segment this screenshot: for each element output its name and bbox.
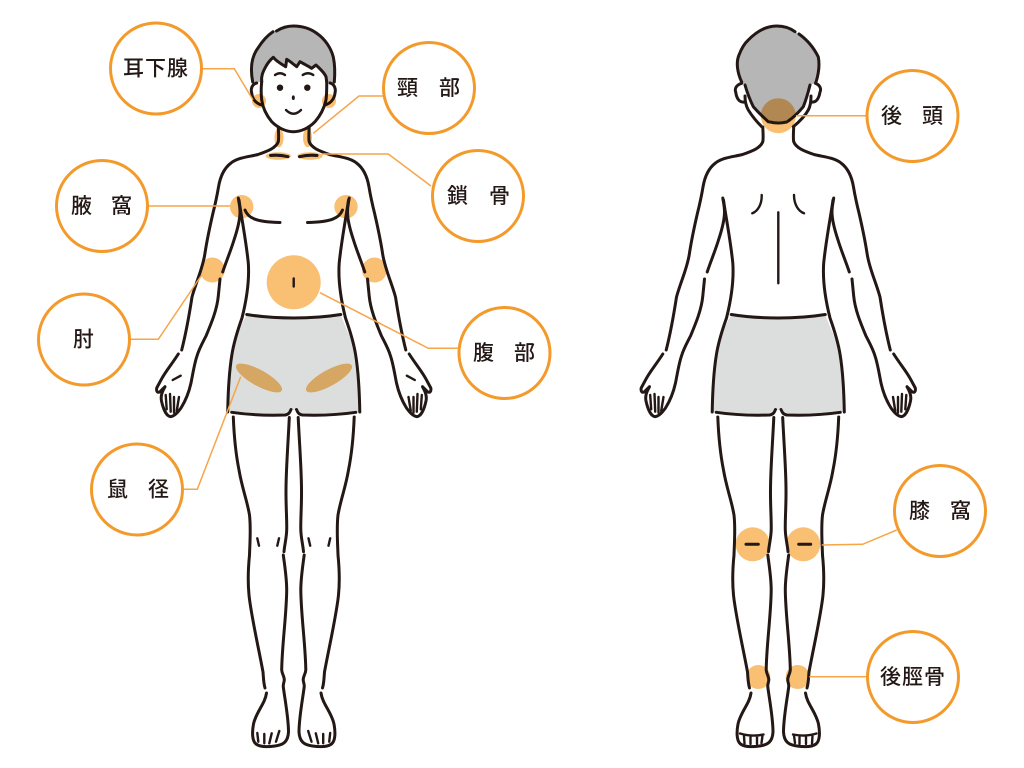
callout: axilla <box>56 160 148 252</box>
face outline <box>261 82 327 132</box>
back body left <box>641 127 778 747</box>
back body right <box>778 127 915 747</box>
hair outline <box>252 32 273 82</box>
callout: clavicle <box>432 150 524 242</box>
shorts <box>228 315 360 415</box>
callout: parotid: 耳下腺 <box>123 58 188 80</box>
leader lines <box>130 69 897 677</box>
callout: abdomen <box>459 308 550 398</box>
highlight: groin <box>232 358 356 398</box>
callout: popliteal <box>894 466 986 556</box>
highlight: abdomen <box>267 255 321 309</box>
callout: axilla: 腋窩 <box>71 195 132 218</box>
head <box>251 26 335 132</box>
front figure <box>157 26 431 747</box>
knee creases <box>746 543 811 546</box>
callout: occiput: 後頭 <box>881 105 943 128</box>
highlight: popliteal <box>736 527 820 561</box>
highlight: elbow <box>200 258 387 282</box>
nape <box>745 85 810 122</box>
nape line <box>770 122 787 123</box>
shoulder blades <box>752 195 804 213</box>
highlight: occiput <box>761 98 796 133</box>
back figure <box>641 26 915 747</box>
highlight: ankle <box>746 665 810 689</box>
callout: clavicle: 鎖骨 <box>447 185 510 208</box>
body outline right <box>294 127 431 747</box>
shorts <box>712 315 844 415</box>
callout: groin: 鼠径 <box>107 478 169 502</box>
head outline <box>737 26 819 83</box>
spine <box>777 212 779 283</box>
body outline left <box>157 127 294 747</box>
brows and mouth <box>275 73 313 114</box>
callout: neck: 頸部 <box>397 77 460 100</box>
callout: popliteal: 膝窩 <box>909 500 971 523</box>
callout: posterior tibial: 後脛骨 <box>880 666 945 689</box>
eyes <box>277 84 310 100</box>
navel <box>293 278 295 286</box>
ears <box>251 83 335 105</box>
hair <box>737 26 819 122</box>
callout: neck <box>384 42 474 134</box>
callout: abdomen: 腹部 <box>473 342 535 365</box>
callout: parotid <box>110 23 202 114</box>
callout: occiput <box>867 70 958 162</box>
hair <box>252 26 335 82</box>
highlight: axilla <box>230 195 358 218</box>
highlight: neck <box>274 128 312 147</box>
highlight: parotid <box>252 94 336 108</box>
highlight: clavicle <box>266 152 323 160</box>
callout: elbow <box>38 294 130 385</box>
callout: posterior tibial <box>868 632 958 722</box>
ears <box>735 83 821 127</box>
callout: elbow: 肘 <box>73 328 94 352</box>
callout: groin <box>92 444 182 535</box>
